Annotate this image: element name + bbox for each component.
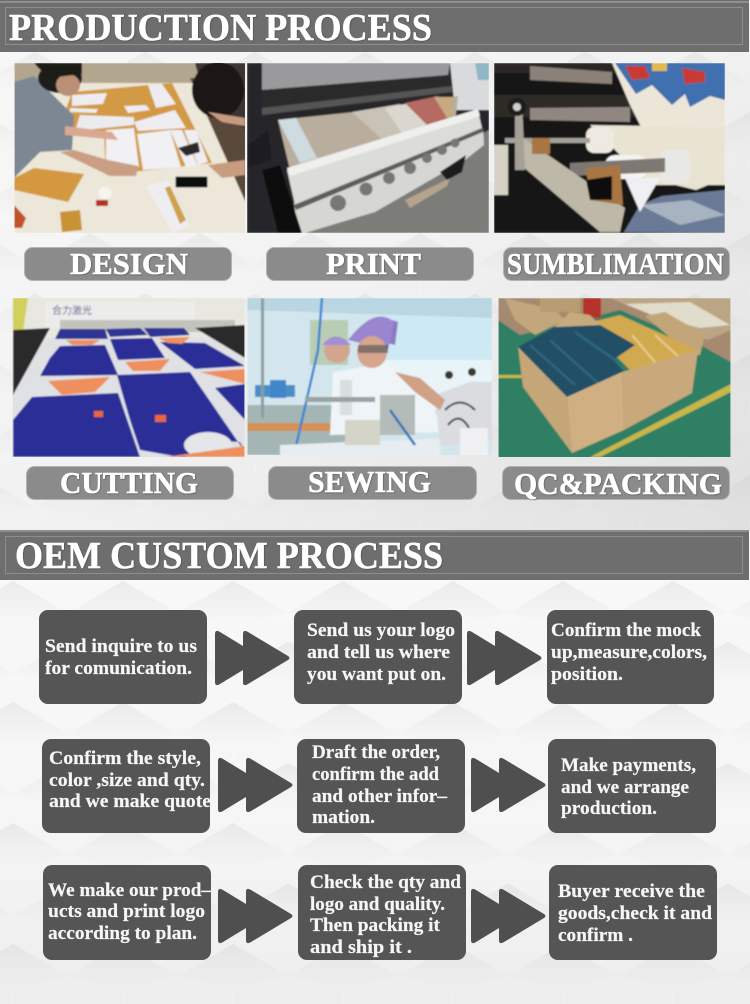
heading: production process bbox=[0, 0, 749, 52]
photo: cutting bbox=[12, 298, 245, 458]
step 4: confirm style: and we make quote bbox=[49, 792, 211, 812]
arrow 6 bbox=[471, 889, 546, 943]
step 1: send inquire: Send inquire to us bbox=[45, 637, 197, 657]
step 1: send inquire: for comunication. bbox=[45, 659, 192, 679]
step 8: check and ship bbox=[298, 865, 466, 960]
heading: production process: PRODUCTION PROCESS bbox=[9, 7, 432, 49]
step 9: buyer receive: Buyer receive the bbox=[558, 882, 705, 902]
step 9: buyer receive: confirm . bbox=[558, 926, 633, 946]
step 7: make products: ucts and print logo bbox=[48, 902, 205, 922]
step 9: buyer receive: goods,check it and bbox=[558, 904, 713, 924]
step 7: make products: We make our prod– bbox=[48, 881, 212, 901]
arrow 3 bbox=[218, 758, 292, 812]
step 2: send logo bbox=[294, 610, 462, 704]
step 6: make payments bbox=[548, 739, 716, 833]
label: cutting bbox=[26, 465, 234, 500]
heading: oem custom process bbox=[0, 530, 749, 580]
photo: cutting: 合力激光 bbox=[52, 304, 92, 317]
photo: design bbox=[14, 62, 246, 233]
photo: sublimation bbox=[494, 63, 725, 233]
step 4: confirm style bbox=[42, 739, 211, 833]
step 7: make products: according to plan. bbox=[48, 924, 197, 944]
step 8: check and ship: and ship it . bbox=[310, 938, 412, 958]
label: sewing: SEWING bbox=[308, 464, 431, 499]
heading: oem custom process: OEM CUSTOM PROCESS bbox=[15, 535, 443, 577]
label: design bbox=[24, 246, 232, 281]
step 8: check and ship: Then packing it bbox=[310, 916, 441, 936]
label: sewing bbox=[268, 464, 476, 500]
step 3: confirm mock up: up,measure,colors, bbox=[551, 643, 707, 663]
step 8: check and ship: logo and quality. bbox=[310, 895, 445, 915]
step 3: confirm mock up bbox=[547, 610, 714, 704]
arrow 2 bbox=[467, 631, 542, 685]
step 5: draft the order: Draft the order, bbox=[312, 743, 440, 763]
step 2: send logo: you want put on. bbox=[307, 665, 446, 685]
step 4: confirm style: color ,size and qty. bbox=[49, 771, 205, 791]
label: cutting: CUTTING bbox=[60, 465, 198, 500]
step 5: draft the order: confirm the add bbox=[312, 765, 440, 785]
step 5: draft the order bbox=[297, 739, 465, 833]
photo: print bbox=[247, 63, 489, 233]
step 5: draft the order: mation. bbox=[312, 808, 375, 828]
label: qc and packing: QC&PACKING bbox=[514, 466, 722, 501]
step 9: buyer receive bbox=[549, 865, 717, 960]
arrow 1 bbox=[215, 631, 290, 685]
step 2: send logo: and tell us where bbox=[307, 643, 450, 663]
step 3: confirm mock up: Confirm the mock bbox=[551, 621, 702, 641]
step 8: check and ship: Check the qty and bbox=[310, 873, 462, 893]
step 5: draft the order: and other infor– bbox=[312, 787, 448, 807]
step 2: send logo: Send us your logo bbox=[307, 621, 455, 641]
step 6: make payments: and we arrange bbox=[561, 778, 689, 798]
label: print: PRINT bbox=[326, 246, 421, 281]
step 7: make products bbox=[43, 865, 212, 960]
photo: sewing bbox=[247, 298, 492, 456]
label: print bbox=[266, 246, 474, 281]
step 1: send inquire bbox=[39, 610, 207, 704]
step 6: make payments: Make payments, bbox=[561, 756, 696, 776]
step 4: confirm style: Confirm the style, bbox=[49, 749, 201, 769]
step 6: make payments: production. bbox=[561, 799, 657, 819]
step 3: confirm mock up: position. bbox=[551, 665, 623, 685]
arrow 5 bbox=[218, 889, 292, 943]
label: design: DESIGN bbox=[70, 246, 188, 281]
arrow 4 bbox=[471, 758, 546, 812]
photo: packing bbox=[498, 298, 731, 458]
